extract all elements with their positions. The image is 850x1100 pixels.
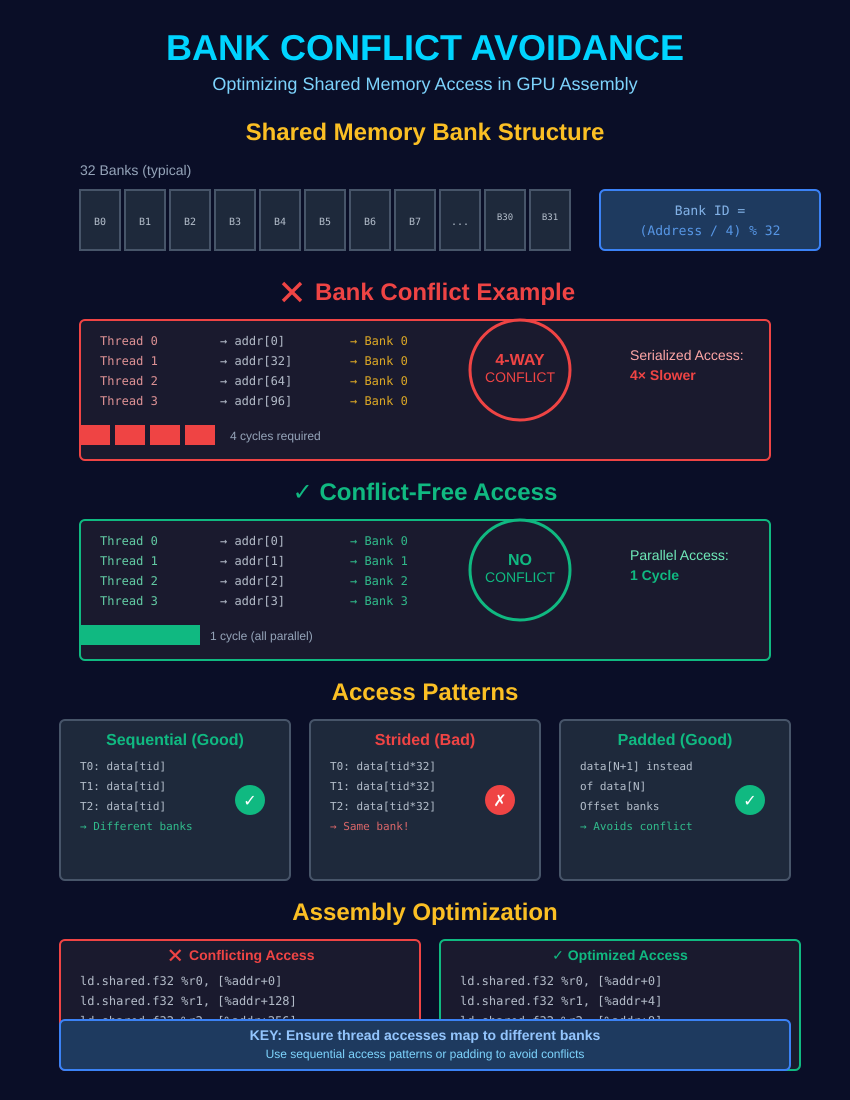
heading: shared memory bank structure: Shared Memory Bank Structure <box>246 119 604 146</box>
panel: conflicting access: ld.shared.f32 %r2, [%addr+256] <box>80 1014 297 1028</box>
thread mapping table <box>100 534 408 608</box>
panel: sequential: → Different banks <box>80 820 193 833</box>
panel: strided: T0: data[tid*32] <box>330 760 436 773</box>
thread mapping table <box>100 334 408 408</box>
memory bank row: B7 <box>409 217 421 228</box>
panel: strided: Strided (Bad) <box>375 732 475 749</box>
panel: optimized access: ✓ Optimized Access <box>552 947 688 963</box>
icon: check <box>735 785 765 815</box>
badge: 4-way conflict: 4-WAY <box>495 352 545 369</box>
thread mapping table: → addr[0] <box>220 534 285 548</box>
thread mapping table: Thread 3 <box>100 594 158 608</box>
memory bank row: B1 <box>139 217 151 228</box>
panel: conflict-free access <box>80 520 770 660</box>
panel: conflicting access: ld.shared.f32 %r1, [%addr+128] <box>80 994 297 1008</box>
panel: conflicting access: Conflicting Access <box>189 947 315 963</box>
icon: cross: ✗ <box>493 793 507 810</box>
thread mapping table: → Bank 0 <box>350 374 408 388</box>
panel: sequential: T2: data[tid] <box>80 800 166 813</box>
panel: sequential: Sequential (Good) <box>106 732 244 749</box>
panel: conflicting access: ld.shared.f32 %r0, [%addr+0] <box>80 974 282 988</box>
thread mapping table: → Bank 2 <box>350 574 408 588</box>
thread mapping table: → addr[0] <box>220 334 285 348</box>
note: serialized access: 4× Slower <box>630 367 696 383</box>
panel: padded: → Avoids conflict <box>580 820 693 833</box>
thread mapping table: Thread 0 <box>100 534 158 548</box>
memory bank row: B2 <box>184 217 196 228</box>
note: serialized access <box>630 347 744 383</box>
memory bank row <box>80 190 570 250</box>
memory bank row: B3 <box>229 217 241 228</box>
cycle bars: 4 cycles <box>80 425 321 445</box>
panel: sequential <box>60 720 290 880</box>
badge: no conflict: CONFLICT <box>485 569 555 585</box>
thread mapping table: Thread 1 <box>100 554 158 568</box>
heading: bank conflict example: Bank Conflict Example <box>315 279 575 306</box>
thread mapping table: Thread 1 <box>100 354 158 368</box>
thread mapping table: → addr[64] <box>220 374 292 388</box>
thread mapping table: → addr[32] <box>220 354 292 368</box>
panel: strided: → Same bank! <box>330 820 409 833</box>
panel: sequential: T0: data[tid] <box>80 760 166 773</box>
panel: padded: of data[N] <box>580 780 646 793</box>
badge: no conflict: NO <box>508 552 532 569</box>
callout: key takeaway <box>60 1020 790 1070</box>
thread mapping table: → addr[96] <box>220 394 292 408</box>
note: parallel access: Parallel Access: <box>630 547 729 563</box>
memory bank row: B5 <box>319 217 331 228</box>
thread mapping table: → addr[3] <box>220 594 285 608</box>
icon: check: ✓ <box>243 793 257 810</box>
thread mapping table: → Bank 0 <box>350 334 408 348</box>
icon: cross <box>170 950 180 960</box>
memory bank row: B0 <box>94 217 106 228</box>
thread mapping table: → Bank 0 <box>350 534 408 548</box>
callout: bank id formula: (Address / 4) % 32 <box>640 224 780 239</box>
thread mapping table: → addr[1] <box>220 554 285 568</box>
badge: no conflict <box>470 520 570 620</box>
panel: strided <box>310 720 540 880</box>
panel: conflicting access <box>60 940 420 1070</box>
thread mapping table: → Bank 0 <box>350 354 408 368</box>
cycle bars: 4 cycles: 4 cycles required <box>230 429 321 443</box>
callout: bank id formula <box>600 190 820 250</box>
cycle bar: 1 cycle: 1 cycle (all parallel) <box>210 629 313 643</box>
panel: padded: Offset banks <box>580 800 659 813</box>
thread mapping table: → Bank 0 <box>350 394 408 408</box>
panel: padded <box>560 720 790 880</box>
heading: conflict-free access: ✓ Conflict-Free Access <box>293 479 557 506</box>
icon: check <box>235 785 265 815</box>
thread mapping table: Thread 3 <box>100 394 158 408</box>
panel: optimized access: ld.shared.f32 %r1, [%addr+4] <box>460 994 662 1008</box>
memory bank row: ... <box>451 217 469 228</box>
thread mapping table: → Bank 3 <box>350 594 408 608</box>
subtitle: Optimizing Shared Memory Access in GPU Assembly <box>212 74 638 94</box>
label: 32 banks: 32 Banks (typical) <box>80 162 191 178</box>
memory bank row: B6 <box>364 217 376 228</box>
memory bank row: B4 <box>274 217 286 228</box>
thread mapping table: → addr[2] <box>220 574 285 588</box>
panel: padded: Padded (Good) <box>618 732 732 749</box>
heading: assembly optimization: Assembly Optimization <box>292 899 558 926</box>
icon: check: ✓ <box>743 793 757 810</box>
panel: strided: T2: data[tid*32] <box>330 800 436 813</box>
panel: bank conflict example <box>80 320 770 460</box>
panel: optimized access: ld.shared.f32 %r2, [%addr+8] <box>460 1014 662 1028</box>
note: parallel access <box>630 547 729 583</box>
thread mapping table: → Bank 1 <box>350 554 408 568</box>
panel: strided: T1: data[tid*32] <box>330 780 436 793</box>
thread mapping table: Thread 2 <box>100 574 158 588</box>
memory bank row: B31 <box>542 213 558 223</box>
panel: optimized access <box>440 940 800 1070</box>
thread mapping table: Thread 0 <box>100 334 158 348</box>
badge: 4-way conflict: CONFLICT <box>485 369 555 385</box>
note: parallel access: 1 Cycle <box>630 567 679 583</box>
title: BANK CONFLICT AVOIDANCE <box>166 27 684 68</box>
callout: key takeaway: KEY: Ensure thread accesses map to different banks <box>250 1027 601 1043</box>
heading: access patterns: Access Patterns <box>332 679 518 706</box>
memory bank row: B30 <box>497 213 513 223</box>
icon: cross <box>485 785 515 815</box>
note: serialized access: Serialized Access: <box>630 347 744 363</box>
cycle bar: 1 cycle <box>80 625 313 645</box>
thread mapping table: Thread 2 <box>100 374 158 388</box>
panel: padded: data[N+1] instead <box>580 760 693 773</box>
callout: key takeaway: Use sequential access patterns or padding to avoid conflicts <box>266 1047 584 1061</box>
panel: optimized access: ld.shared.f32 %r0, [%addr+0] <box>460 974 662 988</box>
callout: bank id formula: Bank ID = <box>675 204 745 219</box>
badge: 4-way conflict <box>470 320 570 420</box>
panel: sequential: T1: data[tid] <box>80 780 166 793</box>
